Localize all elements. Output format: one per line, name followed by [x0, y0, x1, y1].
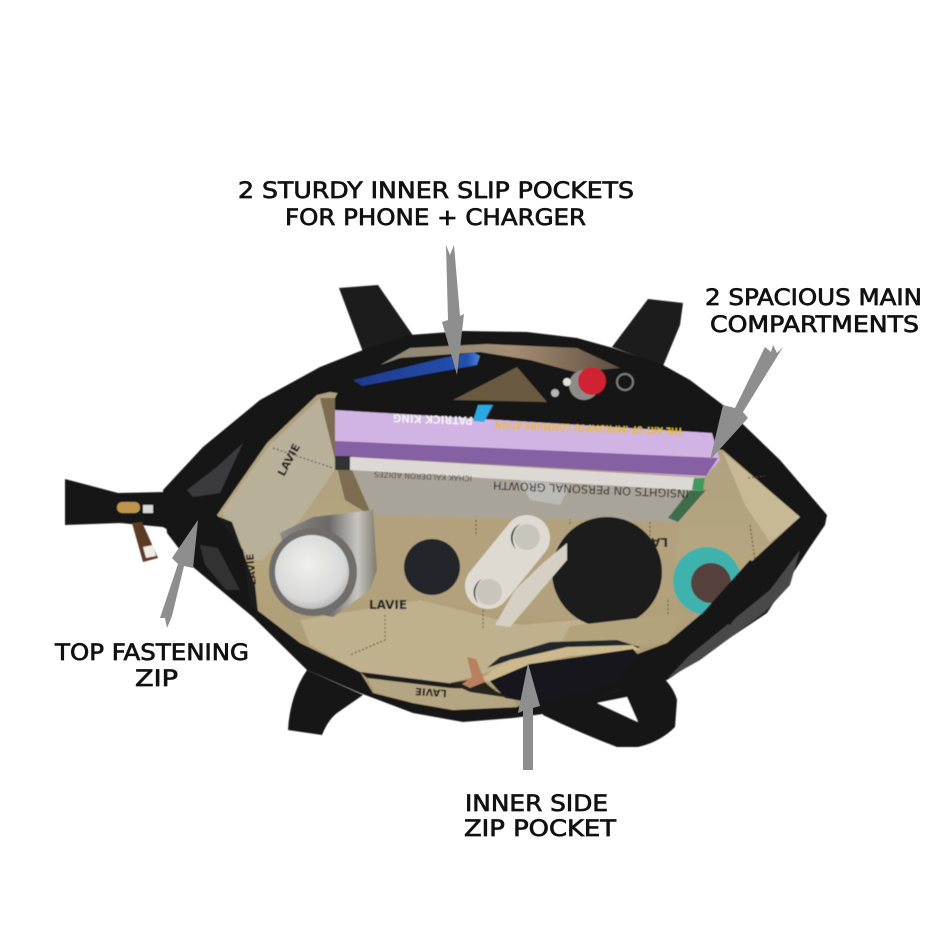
callout: main compartments: 2 SPACIOUS MAIN: [705, 286, 922, 311]
inner zip pocket: [450, 640, 640, 704]
earbud top: [514, 524, 540, 550]
green tab: [692, 478, 705, 491]
bag photo illustration: [65, 285, 827, 747]
lining flap over speaker: [560, 615, 683, 650]
bottle lid: [275, 535, 349, 609]
steel bottle: [269, 510, 377, 617]
book: Insights on Personal Growth: [335, 456, 706, 522]
arrow: to main compartments: [710, 345, 783, 460]
lining pale right corner: [723, 452, 800, 542]
lining dashed lines: [273, 448, 765, 655]
bag outer shell: [163, 331, 827, 722]
callout: main compartments: [705, 286, 922, 338]
cover: [352, 468, 703, 522]
zip slider: [117, 502, 140, 513]
title: INSIGHTS ON PERSONAL GROWTH: [493, 478, 689, 500]
shadowed pages: [335, 441, 718, 476]
callout: top fastening zip: TOP FASTENING: [54, 641, 249, 666]
shell edge over tape roll: [700, 560, 772, 625]
earbud bottom: [476, 579, 502, 605]
black spine: [335, 399, 716, 433]
spine: [350, 457, 705, 491]
lining dark corner by books: [320, 398, 372, 516]
title: THE ART OF IMPROMPTU COMMUNICATION: [495, 418, 683, 436]
zip tag: [132, 522, 158, 562]
lining map print: LAVIE: [630, 535, 668, 549]
author: ICHAK KALDERON ADIZES: [374, 470, 472, 483]
callout: inner side zip pocket: INNER SIDE: [465, 792, 608, 817]
book: The Art of Impromptu Communication: [335, 399, 720, 477]
black round speaker: [552, 517, 662, 627]
lining map print: LAVIE: [245, 553, 259, 586]
handle: top right: [612, 299, 683, 366]
arrow: to slip pockets: [442, 245, 464, 375]
handle: bottom left: [288, 670, 363, 735]
dark end band: [335, 456, 351, 470]
callout: slip pockets: [238, 179, 634, 231]
handle: bottom right: [543, 672, 677, 747]
lining lower strip: [367, 677, 517, 710]
lining fold light: [300, 600, 680, 683]
bottle body: [280, 510, 377, 617]
lining map print: [245, 441, 668, 698]
callout: top fastening zip: [54, 641, 249, 692]
callout: inner side zip pocket: ZIP POCKET: [464, 817, 617, 842]
author: PATRICK KING: [393, 411, 473, 427]
callout: inner side zip pocket: [464, 792, 617, 842]
shell highlight lower left: [200, 545, 240, 590]
callout: main compartments: COMPARTMENTS: [710, 313, 919, 338]
shell highlight right: [668, 550, 800, 678]
callout: slip pockets: FOR PHONE + CHARGER: [285, 206, 586, 231]
callout: top fastening zip: ZIP: [135, 667, 178, 692]
phone in slip pocket: [353, 352, 480, 386]
flower emblem: [617, 374, 633, 390]
pocket zip pull: [462, 657, 485, 688]
bottle rim: [269, 528, 357, 616]
green cover edge: [668, 490, 706, 522]
cut-out between bottom right handle strap and bag: [597, 697, 638, 722]
black round tin: [404, 539, 460, 595]
lining mid band: [372, 516, 680, 620]
lining lower rim: [360, 672, 500, 690]
red cap: [578, 367, 606, 395]
lining dark left seam: [217, 516, 258, 612]
blue slash: [473, 405, 493, 422]
upper pocket area: [335, 342, 716, 436]
pocket divider: [453, 367, 547, 402]
lining map print: LAVIE: [275, 441, 303, 478]
silver ring: [569, 370, 599, 400]
handle: top left: [339, 285, 414, 352]
dark outer trim: [487, 640, 640, 668]
back wall of pocket: [380, 344, 620, 372]
zip tail: [65, 479, 185, 540]
lining interior: [217, 392, 800, 710]
purple pages: [335, 410, 720, 477]
shell highlight left: [187, 443, 243, 497]
wireless earbuds case: [474, 524, 567, 627]
tan binding: [478, 645, 640, 682]
teal tape roll: [673, 547, 741, 615]
arrow: to inner side zip pocket: [518, 663, 540, 770]
silver clasp: [563, 378, 571, 386]
lining upper left pale area: [222, 398, 335, 560]
zip end tab: [143, 505, 153, 513]
keychain: [551, 367, 633, 400]
black pocket: [490, 649, 640, 704]
LAVIE print: LAVIE: [369, 598, 407, 612]
callout: slip pockets: 2 STURDY INNER SLIP POCKETS: [238, 179, 634, 204]
lining map print: LAVIE: [415, 685, 447, 698]
arrow: to top fastening zip: [160, 520, 198, 628]
pocket slit: [450, 678, 510, 698]
case base: [488, 538, 527, 586]
case lid: [495, 543, 567, 627]
zipper pull: [117, 502, 158, 562]
